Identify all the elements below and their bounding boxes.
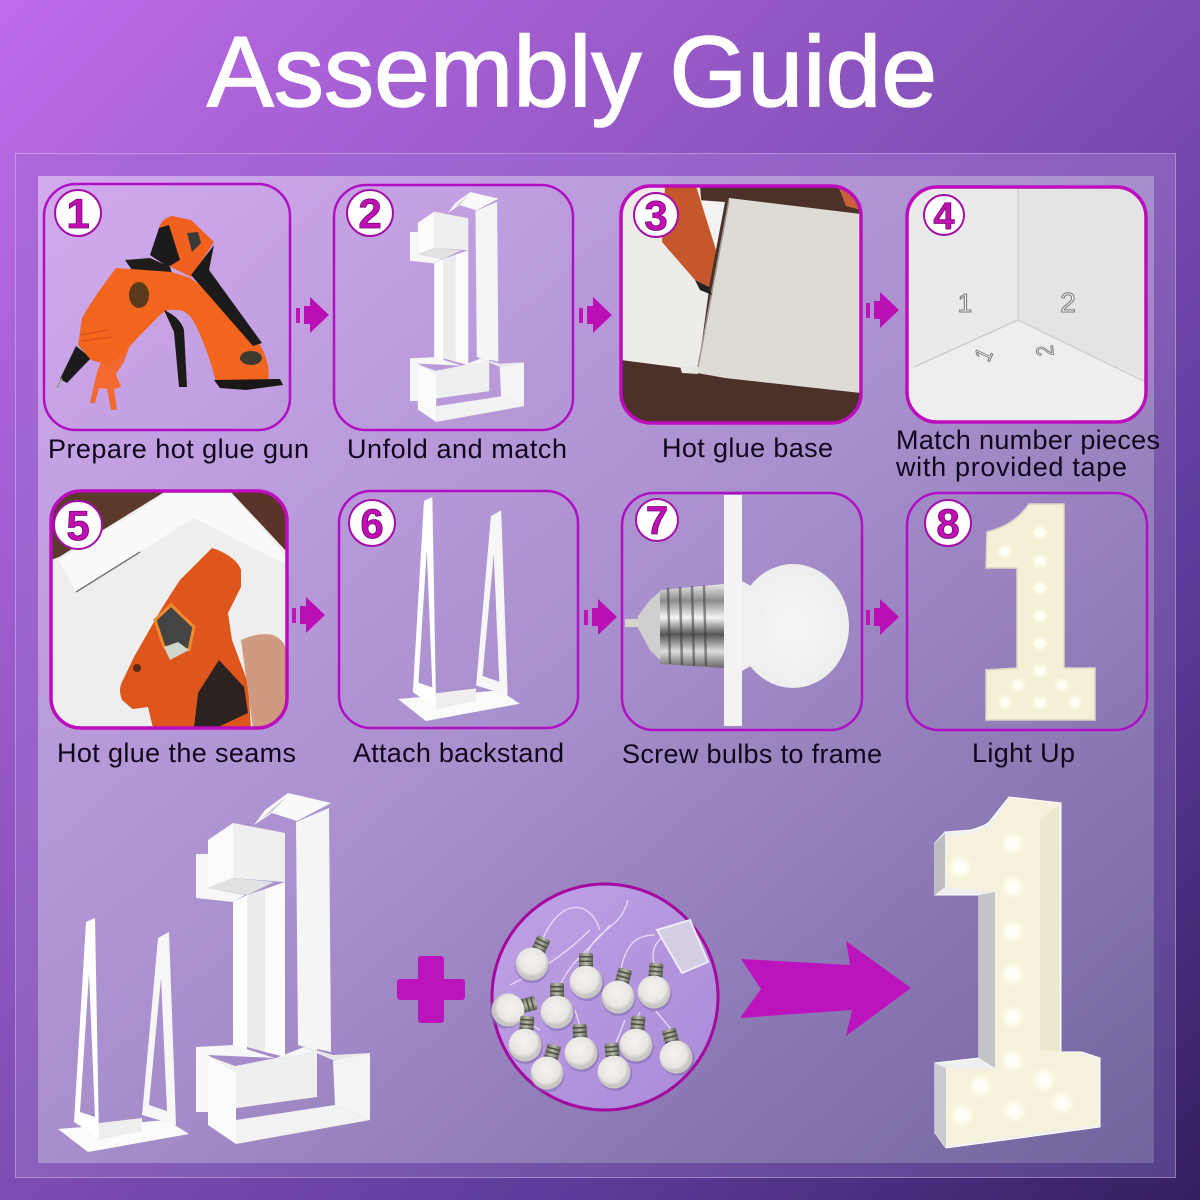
- step number 3: 3: [644, 192, 668, 239]
- large folded number one: [196, 793, 370, 1144]
- folded number one: [410, 192, 524, 422]
- step number 1: 1: [66, 190, 90, 237]
- icon: large bulb through frame: [625, 495, 849, 726]
- caption 5: Hot glue the seams: [57, 738, 296, 768]
- arrow 3 to 4: [866, 292, 899, 328]
- icon: orange hot glue gun: [57, 216, 283, 410]
- arrow 7 to 8: [866, 599, 899, 635]
- circle: string of bulbs: [485, 884, 718, 1110]
- caption 1: Prepare hot glue gun: [48, 434, 309, 464]
- large backstand: [58, 918, 189, 1152]
- big arrow: [740, 941, 911, 1036]
- caption 4: Match number pieces: [896, 425, 1160, 455]
- photo: corner with numbers: [907, 187, 1146, 422]
- step number 4: [924, 195, 964, 238]
- step number 8: [925, 500, 971, 547]
- lit number one: [986, 504, 1095, 720]
- photo: corner with numbers: 2: [1031, 344, 1059, 357]
- photo: gluing seams: [51, 491, 287, 728]
- step 4: match number pieces: [895, 187, 1160, 482]
- step number 2: [347, 190, 393, 237]
- step number 6: [349, 500, 395, 547]
- step number 4: 4: [933, 196, 955, 238]
- arrow 1 to 2: [296, 297, 329, 333]
- step 5: hot glue the seams: [51, 491, 296, 768]
- caption 8: Light Up: [972, 738, 1075, 768]
- wires: [510, 900, 676, 1048]
- caption 4: [895, 425, 1160, 482]
- caption 3: Hot glue base: [662, 433, 833, 463]
- step 8: light up: [907, 493, 1147, 768]
- plus sign: [397, 956, 465, 1023]
- step 6: attach backstand: [339, 491, 578, 768]
- step number 2: 2: [358, 190, 382, 237]
- caption 6: Attach backstand: [353, 738, 564, 768]
- backstand: [398, 497, 520, 721]
- photo: corner with numbers: 1: [969, 344, 998, 365]
- large lit number one: [935, 797, 1100, 1148]
- step 1: prepare hot glue gun: [44, 184, 309, 464]
- card border 7: [622, 493, 862, 730]
- step number 7: [636, 499, 678, 543]
- photo: corner with numbers: 1: [958, 288, 972, 318]
- card border 2: [334, 185, 573, 430]
- caption 7: Screw bulbs to frame: [622, 739, 882, 769]
- step number 8: 8: [936, 500, 960, 547]
- card border 5: [51, 491, 287, 728]
- step 3: hot glue base: [621, 186, 861, 463]
- card border 6: [339, 491, 578, 728]
- card border 3: [621, 186, 861, 423]
- arrow 6 to 7: [584, 599, 617, 635]
- step number 5: 5: [66, 502, 90, 549]
- photo: glue gun on board: [621, 186, 861, 423]
- bulbs: [485, 931, 698, 1096]
- step 2: unfold and match: [334, 185, 573, 464]
- step number 3: [634, 192, 678, 239]
- caption 4: with provided tape: [895, 452, 1127, 482]
- arrow 2 to 3: [579, 297, 612, 333]
- card border 4: [907, 187, 1146, 422]
- step number 7: 7: [646, 499, 668, 543]
- arrow 5 to 6: [292, 597, 325, 633]
- step number 5: [54, 501, 102, 549]
- battery box: [657, 920, 708, 973]
- step number 6: 6: [360, 500, 384, 547]
- title: Assembly Guide: [207, 16, 937, 128]
- photo: corner with numbers: 2: [1060, 287, 1076, 318]
- card border 1: [44, 184, 290, 430]
- step number 1: [55, 190, 101, 237]
- step 7: screw bulbs to frame: [622, 493, 882, 769]
- caption 2: Unfold and match: [347, 434, 567, 464]
- card border 8: [907, 493, 1147, 730]
- panel: inner content: [38, 176, 1154, 1163]
